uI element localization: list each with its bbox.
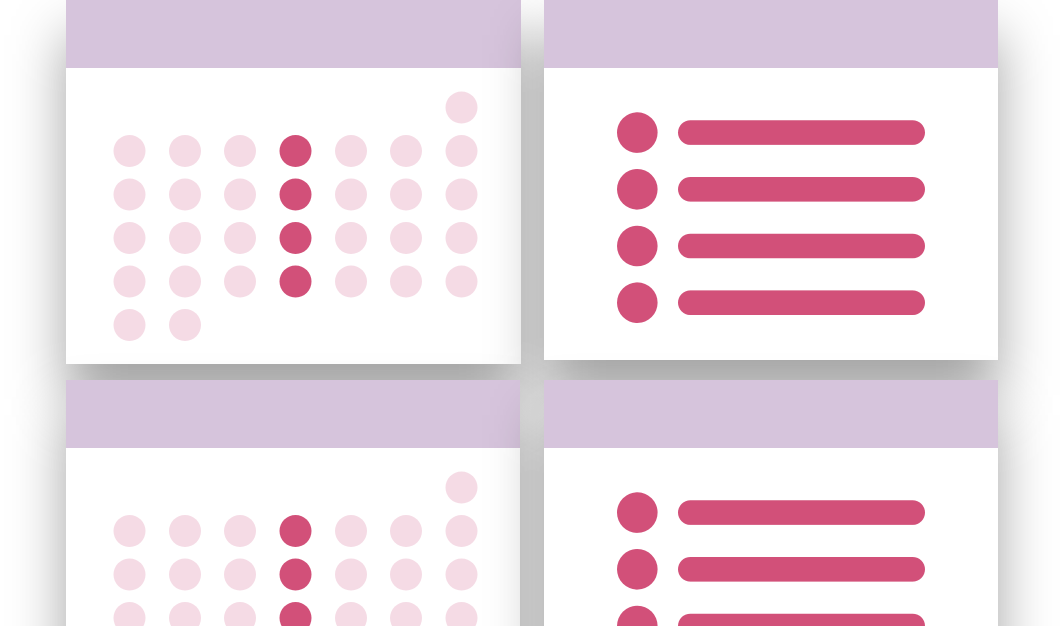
panel: bottom-left dot grid card (66, 380, 520, 626)
header band: top-left card (66, 0, 521, 68)
header band: top-right card (544, 0, 998, 68)
header band: bottom-left card (66, 380, 520, 448)
list rows: top-right card (617, 112, 925, 323)
header band: bottom-right card (544, 380, 998, 448)
panel: bottom-right list card (544, 380, 998, 626)
panel: top-right list card (544, 0, 998, 360)
dot grid: top-left card (114, 92, 478, 341)
dot grid: bottom-left card (114, 472, 478, 626)
panel: top-left dot grid card (66, 0, 521, 364)
list rows: bottom-right card (617, 492, 925, 626)
